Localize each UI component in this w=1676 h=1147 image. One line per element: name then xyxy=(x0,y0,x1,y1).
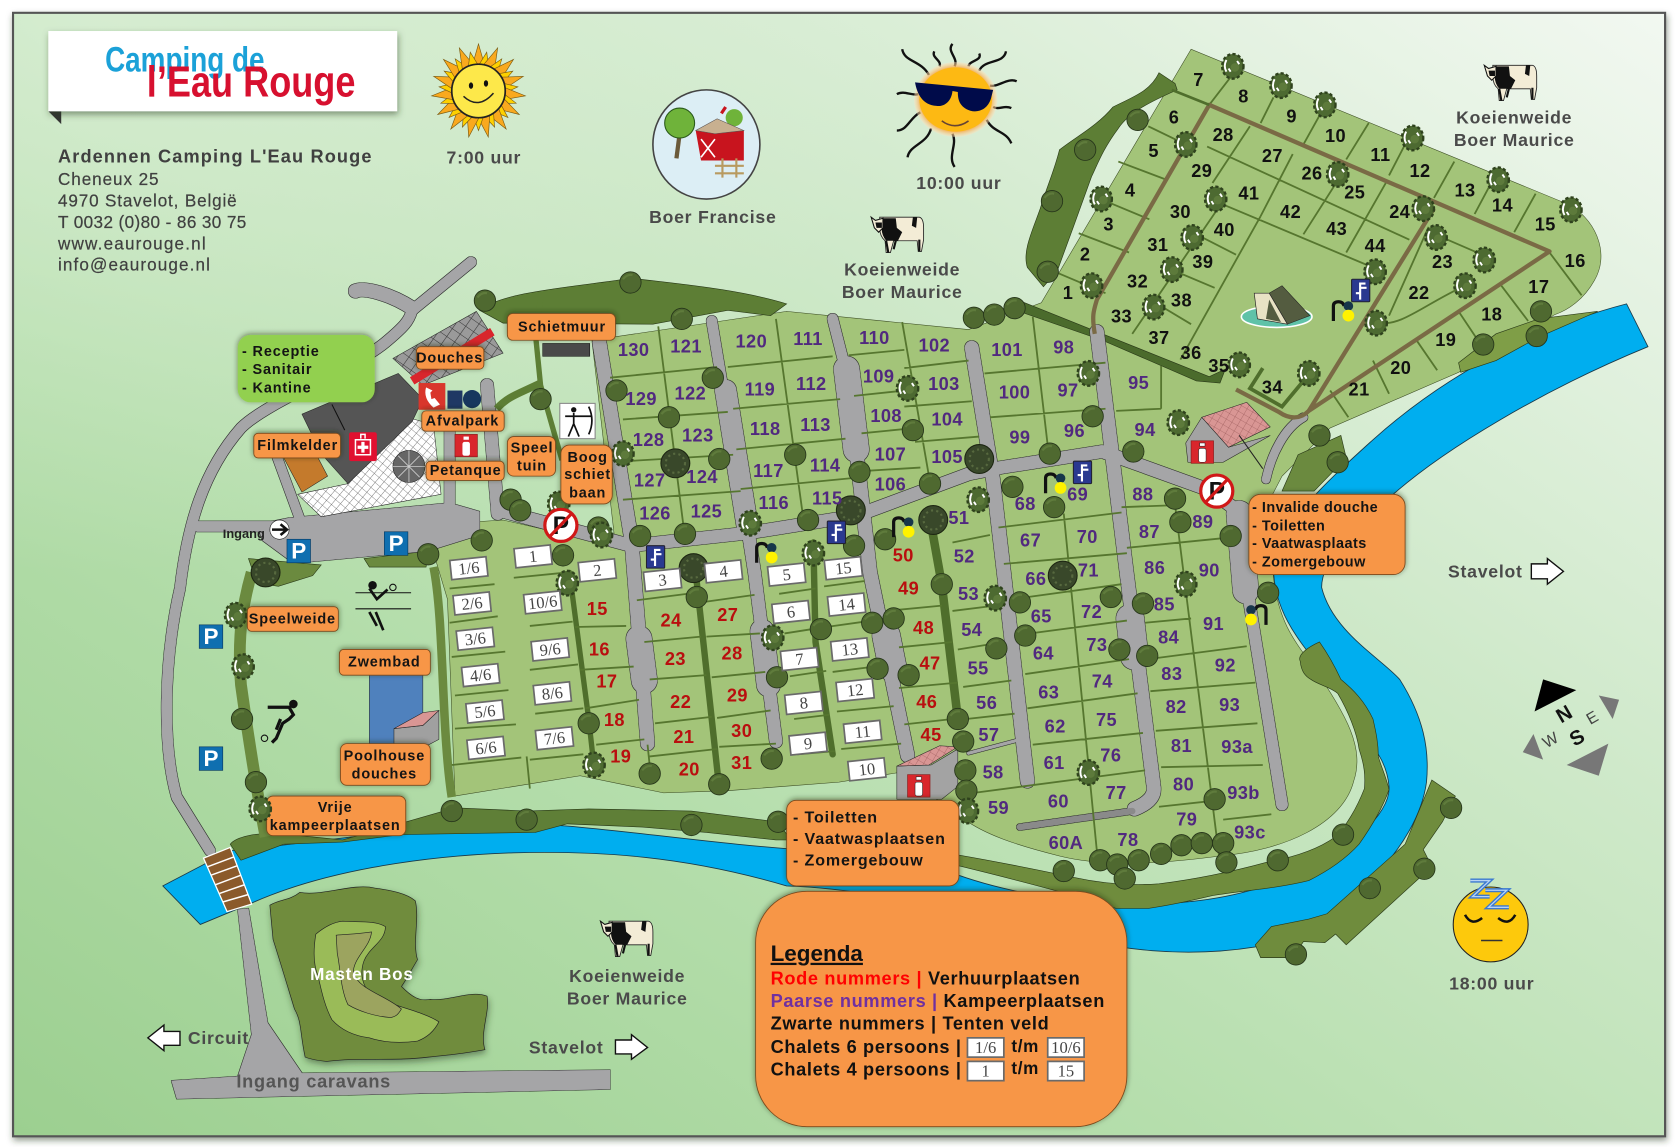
legend panel xyxy=(756,891,1127,1127)
compass xyxy=(1523,679,1619,776)
purple camping pitch numbers: 64 xyxy=(1033,644,1054,664)
orange label: Schietmuur: Schietmuur xyxy=(518,319,606,335)
chalet number plates: 3/6 xyxy=(464,628,487,649)
orange label: Douches: Douches xyxy=(416,350,483,366)
orange label: Petanque: Petanque xyxy=(430,463,502,479)
orange label: Speeltuin: Speel xyxy=(511,440,553,456)
direction: Stavelot east: Stavelot xyxy=(1448,561,1523,581)
orange label: Speelweide xyxy=(247,607,338,631)
red rental pitch numbers: 49 xyxy=(898,578,919,598)
red rental pitch numbers: 30 xyxy=(731,721,752,741)
purple camping pitch numbers: 63 xyxy=(1038,682,1059,702)
black tent field numbers: 44 xyxy=(1365,236,1386,256)
chalet number plates: 1/6 xyxy=(457,558,480,579)
entrance arrow: Ingang xyxy=(223,526,265,541)
orange label: Speeltuin: tuin xyxy=(517,459,547,475)
purple camping pitch numbers: 85 xyxy=(1154,595,1175,615)
red rental pitch numbers: 50 xyxy=(893,545,914,565)
icon: cow and label top right: Koeienweide xyxy=(1456,108,1572,128)
label: 18:00 uur: 18:00 uur xyxy=(1449,973,1534,993)
purple camping pitch numbers: 79 xyxy=(1176,810,1197,830)
purple camping pitch numbers: 84 xyxy=(1158,628,1180,648)
chalet number plates: 15 xyxy=(834,558,853,578)
purple camping pitch numbers: 51 xyxy=(948,508,969,528)
orange label: Zwembad xyxy=(339,649,430,675)
icon: volleyball players xyxy=(355,582,411,630)
purple camping pitch numbers: 108 xyxy=(870,406,902,426)
purple camping pitch numbers: 122 xyxy=(675,384,706,404)
orange label: Zwembad: Zwembad xyxy=(348,654,421,670)
green label: Receptie: - Sanitair xyxy=(242,362,312,378)
chalet number plates: 9/6 xyxy=(539,639,562,660)
purple camping pitch numbers: 53 xyxy=(958,584,979,604)
black tent field numbers: 35 xyxy=(1208,356,1229,376)
red rental pitch numbers: 19 xyxy=(610,746,631,766)
purple camping pitch numbers: 93 xyxy=(1219,695,1240,715)
chalet number plates: 10 xyxy=(858,759,876,780)
purple camping pitch numbers: 106 xyxy=(875,475,906,495)
purple camping pitch numbers: 95 xyxy=(1128,373,1149,393)
direction: Stavelot south: Stavelot xyxy=(529,1037,604,1057)
black tent field numbers: 8 xyxy=(1238,86,1249,106)
compass: W xyxy=(1540,728,1562,752)
purple camping pitch numbers: 93c xyxy=(1234,822,1266,842)
purple camping pitch numbers: 60 xyxy=(1048,791,1069,811)
black tent field numbers: 40 xyxy=(1214,220,1235,240)
roads xyxy=(167,262,1303,1099)
purple camping pitch numbers: 124 xyxy=(686,467,718,487)
icon: cow and label bottom: Boer Maurice xyxy=(567,988,688,1008)
black tent field numbers: 36 xyxy=(1181,343,1202,363)
tent field icon xyxy=(1241,286,1312,327)
purple camping pitch numbers: 73 xyxy=(1086,635,1107,655)
purple camping pitch numbers: 123 xyxy=(682,425,714,445)
chalet number plates: 12 xyxy=(846,680,864,700)
icons: parking signs xyxy=(199,531,408,771)
purple camping pitch numbers: 105 xyxy=(931,447,963,467)
purple camping pitch numbers: 59 xyxy=(988,798,1009,818)
purple camping pitch numbers: 80 xyxy=(1173,774,1194,794)
chalet number plates: 1 xyxy=(528,546,538,566)
purple camping pitch numbers: 101 xyxy=(991,340,1023,360)
address text block: Ardennen Camping L'Eau Rouge xyxy=(58,147,371,167)
purple camping pitch numbers: 104 xyxy=(931,409,963,429)
icon: soccer player xyxy=(261,700,297,743)
black tent field numbers: 39 xyxy=(1192,252,1213,272)
chalet number plates: 9 xyxy=(803,734,813,754)
purple camping pitch numbers: 55 xyxy=(968,659,989,679)
red rental pitch numbers: 16 xyxy=(589,639,610,659)
purple camping pitch numbers: 130 xyxy=(618,340,649,360)
black tent field numbers: 27 xyxy=(1262,146,1283,166)
bridge xyxy=(204,847,252,912)
compass: S xyxy=(1566,725,1589,751)
black tent field numbers: 3 xyxy=(1103,215,1114,235)
address text block: info@eaurouge.nl xyxy=(58,256,210,275)
icons: water taps xyxy=(646,279,1370,568)
swimming pool and poolhouse xyxy=(369,672,439,748)
purple camping pitch numbers: 61 xyxy=(1044,753,1065,773)
black tent field numbers: 17 xyxy=(1528,277,1549,297)
icon: cow and label top right xyxy=(1454,65,1575,150)
purple camping pitch numbers: 107 xyxy=(875,445,906,465)
black tent field numbers: 24 xyxy=(1389,202,1411,222)
river xyxy=(163,304,1648,952)
campsite ground xyxy=(428,49,1601,863)
black tent field numbers xyxy=(1063,70,1586,399)
purple camping pitch numbers: 88 xyxy=(1132,484,1153,504)
orange label: Filmkelder: Filmkelder xyxy=(257,438,338,454)
purple camping pitch numbers: 126 xyxy=(639,504,671,524)
chalet number plates: 7 xyxy=(794,649,805,669)
icon: archery xyxy=(560,403,595,439)
orange label: east facilities: - Zomergebouw xyxy=(1252,554,1366,570)
purple camping pitch numbers: 52 xyxy=(954,546,975,566)
black tent field numbers: 11 xyxy=(1370,145,1391,165)
legend panel: t/m xyxy=(1011,1037,1039,1056)
icon: cow and label near sunglasses sun xyxy=(842,217,963,302)
direction: Stavelot south xyxy=(529,1035,648,1059)
chalet number plates: 5/6 xyxy=(473,701,496,722)
orange label: Afvalpark: Afvalpark xyxy=(426,414,499,430)
direction: Stavelot east xyxy=(1448,559,1563,584)
orange label: Filmkelder xyxy=(254,433,340,458)
purple camping pitch numbers: 69 xyxy=(1067,484,1088,504)
purple camping pitch numbers: 60A xyxy=(1049,833,1083,853)
black tent field numbers: 42 xyxy=(1280,202,1301,222)
address text block: www.eaurouge.nl xyxy=(57,234,206,253)
chalet number plates: 2/6 xyxy=(461,593,484,614)
black tent field numbers: 13 xyxy=(1454,180,1476,200)
black tent field numbers: 37 xyxy=(1148,328,1170,348)
logo banner: l’Eau Rouge xyxy=(147,57,355,106)
purple camping pitch numbers: 112 xyxy=(796,374,827,394)
purple camping pitch numbers: 119 xyxy=(745,379,775,399)
forest: Masten Bos xyxy=(270,887,488,1061)
purple camping pitch numbers: 98 xyxy=(1053,338,1074,358)
red rental pitch numbers xyxy=(587,545,942,779)
red rental pitch numbers: 15 xyxy=(587,599,608,619)
black tent field numbers: 10 xyxy=(1325,126,1346,146)
purple camping pitch numbers: 54 xyxy=(961,620,983,640)
purple camping pitch numbers: 89 xyxy=(1192,512,1213,532)
red rental pitch numbers: 23 xyxy=(665,649,686,669)
orange label: Poolhouse douches: Poolhouse xyxy=(344,748,425,764)
orange label: Boogschietbaan xyxy=(561,445,612,504)
brown footpaths xyxy=(1093,90,1550,417)
icon: cow and label near sunglasses sun: Boer Maurice xyxy=(842,282,963,302)
purple camping pitch numbers: 86 xyxy=(1144,558,1165,578)
chalet number plates: 5 xyxy=(782,565,792,584)
direction: Circuit: Circuit xyxy=(188,1028,249,1048)
purple camping pitch numbers: 110 xyxy=(859,328,890,348)
address text block: T 0032 (0)80 - 86 30 75 xyxy=(58,213,246,232)
purple camping pitch numbers: 127 xyxy=(634,470,665,490)
orange label: Speelweide: Speelweide xyxy=(249,612,336,628)
tree overlapping the Vrije kampeerplaatsen label xyxy=(250,797,271,821)
purple camping pitch numbers: 100 xyxy=(999,383,1030,403)
chalet number plates: 11 xyxy=(854,722,872,742)
hedges and green river banks xyxy=(230,73,1598,958)
chalet number plates: 4 xyxy=(718,561,729,581)
chalet number plates: 6 xyxy=(786,602,796,622)
purple camping pitch numbers: 102 xyxy=(918,336,950,356)
icon: cow and label near sunglasses sun: Koeienweide xyxy=(844,260,960,280)
purple camping pitch numbers: 74 xyxy=(1092,672,1113,692)
red rental pitch numbers: 48 xyxy=(913,618,934,638)
orange label: Boogschietbaan: Boog xyxy=(567,450,608,466)
black tent field numbers: 4 xyxy=(1125,180,1136,200)
red rental pitch numbers: 21 xyxy=(673,727,694,747)
legend panel: t/m xyxy=(1011,1059,1039,1078)
black tent field numbers: 9 xyxy=(1286,107,1297,127)
black tent field numbers: 6 xyxy=(1169,108,1179,128)
purple camping pitch numbers: 93b xyxy=(1227,783,1260,803)
hedge rows between pitches xyxy=(569,524,958,789)
orange label: east facilities: - Vaatwasplaats xyxy=(1252,536,1367,552)
orange label: east facilities: - Invalide douche xyxy=(1252,500,1378,516)
black tent field numbers: 14 xyxy=(1492,195,1513,215)
orange label: south facilities xyxy=(787,800,959,886)
red rental pitch numbers: 24 xyxy=(661,611,682,631)
purple camping pitch numbers: 111 xyxy=(793,329,823,349)
label: 7:00 uur: 7:00 uur xyxy=(447,147,521,167)
legend panel: Legenda xyxy=(771,941,863,966)
orange label: Poolhouse douches xyxy=(340,744,430,785)
chalet number plates: 4/6 xyxy=(469,665,492,686)
red rental pitch numbers: 45 xyxy=(921,725,942,745)
address text block: Cheneux 25 xyxy=(58,170,159,189)
chalet number plates: 13 xyxy=(841,639,859,660)
purple camping pitch numbers: 92 xyxy=(1215,656,1236,676)
buildings: reception area xyxy=(284,300,590,517)
black tent field numbers: 19 xyxy=(1435,330,1456,350)
logo banner xyxy=(48,31,397,124)
icon: cow and label bottom: Koeienweide xyxy=(569,966,685,986)
purple camping pitch numbers: 93a xyxy=(1221,737,1253,757)
red rental pitch numbers: 29 xyxy=(727,685,748,705)
black tent field numbers: 28 xyxy=(1213,125,1234,145)
purple camping pitch numbers: 78 xyxy=(1117,830,1138,850)
legend panel: Rode nummers | Verhuurplaatsen xyxy=(771,968,1080,988)
chalet number plates: 14 xyxy=(837,594,857,615)
purple camping pitch numbers: 65 xyxy=(1031,606,1052,626)
icon: cow and label bottom xyxy=(567,921,688,1008)
black tent field numbers: 16 xyxy=(1565,251,1586,271)
purple camping pitch numbers: 121 xyxy=(670,337,702,357)
icon: farm circle xyxy=(653,90,760,199)
orange label: Speeltuin xyxy=(507,437,556,476)
chalet number plates: 8/6 xyxy=(541,683,564,704)
black tent field numbers: 43 xyxy=(1326,219,1347,239)
black tent field numbers: 30 xyxy=(1170,202,1191,222)
green label: Receptie: - Kantine xyxy=(242,380,311,396)
legend panel: 15 xyxy=(1058,1062,1074,1081)
purple camping pitch numbers: 90 xyxy=(1199,560,1220,580)
purple camping pitch numbers: 66 xyxy=(1025,569,1046,589)
legend panel: Chalets 6 persoons | xyxy=(771,1037,962,1057)
purple camping pitch numbers: 103 xyxy=(928,374,960,394)
purple camping pitch numbers: 116 xyxy=(758,493,789,513)
orange label: east facilities xyxy=(1249,494,1405,575)
purple camping pitch numbers: 117 xyxy=(753,461,784,481)
black tent field numbers: 29 xyxy=(1191,161,1212,181)
purple camping pitch numbers: 77 xyxy=(1106,783,1127,803)
icons: lamps xyxy=(757,301,1354,625)
toilet building south xyxy=(897,746,958,799)
purple camping pitch numbers: 115 xyxy=(812,489,843,509)
purple camping pitch numbers xyxy=(618,328,1266,853)
black tent field numbers: 41 xyxy=(1238,184,1259,204)
label: Masten Bos: Masten Bos xyxy=(310,965,414,984)
chalet number plates xyxy=(450,545,886,781)
orange label: south facilities: - Vaatwasplaatsen xyxy=(793,830,946,848)
black tent field numbers: 2 xyxy=(1080,245,1090,265)
icons: phone, recycling, first aid, fire xyxy=(349,383,481,461)
black tent field numbers: 33 xyxy=(1111,307,1132,327)
purple camping pitch numbers: 120 xyxy=(736,331,767,351)
orange label: Vrije kampeerplaatsen: kampeerplaatsen xyxy=(270,818,401,834)
legend panel: Zwarte nummers | Tenten veld xyxy=(771,1013,1049,1033)
orange label: Boogschietbaan: schiet xyxy=(564,467,611,483)
purple camping pitch numbers: 76 xyxy=(1100,745,1121,765)
icon: cow and label top right: Boer Maurice xyxy=(1454,130,1575,150)
black tent field numbers: 18 xyxy=(1481,305,1502,325)
black tent field numbers: 12 xyxy=(1410,161,1431,181)
black tent field numbers: 15 xyxy=(1535,215,1556,235)
legend panel: 1/6 xyxy=(975,1038,996,1057)
black tent field numbers: 32 xyxy=(1127,271,1148,291)
icon: sun with sunglasses xyxy=(897,44,1017,167)
icons: no parking xyxy=(545,475,1233,541)
black tent field numbers: 34 xyxy=(1262,377,1283,397)
purple camping pitch numbers: 71 xyxy=(1078,560,1099,580)
red rental pitch numbers: 46 xyxy=(916,692,937,712)
orange label: Boogschietbaan: baan xyxy=(569,485,606,501)
purple camping pitch numbers: 68 xyxy=(1015,494,1036,514)
orange label: south facilities: - Zomergebouw xyxy=(793,851,924,869)
purple camping pitch numbers: 97 xyxy=(1058,381,1079,401)
purple camping pitch numbers: 99 xyxy=(1009,428,1030,448)
purple camping pitch numbers: 91 xyxy=(1203,614,1224,634)
black tent field numbers: 5 xyxy=(1148,141,1159,161)
black tent field numbers: 23 xyxy=(1432,252,1453,272)
orange label: east facilities: - Toiletten xyxy=(1252,518,1325,534)
chalet number plates: 10/6 xyxy=(527,591,558,613)
toilet building east xyxy=(1186,402,1270,469)
black tent field numbers: 1 xyxy=(1063,283,1073,303)
black tent field numbers: 7 xyxy=(1193,70,1204,90)
purple camping pitch numbers: 94 xyxy=(1135,420,1156,440)
purple camping pitch numbers: 128 xyxy=(633,430,664,450)
entrance arrow xyxy=(223,520,289,541)
chalet number plates: 3 xyxy=(657,570,668,590)
purple camping pitch numbers: 96 xyxy=(1064,421,1085,441)
label: 10:00 uur: 10:00 uur xyxy=(916,173,1001,193)
red rental pitch numbers: 28 xyxy=(722,644,743,664)
red rental pitch numbers: 47 xyxy=(919,653,941,673)
orange label: Schietmuur xyxy=(507,313,615,340)
chalet number plates: 8 xyxy=(799,693,809,713)
pitch dividers xyxy=(450,77,1582,855)
green label: Receptie: - Receptie xyxy=(242,344,320,360)
red rental pitch numbers: 27 xyxy=(717,605,738,625)
label: Ingang caravans: Ingang caravans xyxy=(236,1072,391,1092)
logo banner: Camping de xyxy=(105,41,264,80)
purple camping pitch numbers: 118 xyxy=(750,419,781,439)
green label: Receptie xyxy=(238,335,375,430)
black tent field numbers: 20 xyxy=(1390,358,1411,378)
purple camping pitch numbers: 82 xyxy=(1166,697,1187,717)
purple camping pitch numbers: 58 xyxy=(983,763,1004,783)
purple camping pitch numbers: 75 xyxy=(1096,710,1117,730)
purple camping pitch numbers: 87 xyxy=(1139,522,1160,542)
purple camping pitch numbers: 129 xyxy=(625,389,657,409)
red rental pitch numbers: 17 xyxy=(596,672,617,692)
purple camping pitch numbers: 72 xyxy=(1081,602,1102,622)
orange label: Vrije kampeerplaatsen: Vrije xyxy=(318,800,353,816)
trees xyxy=(225,54,1582,965)
direction: Circuit xyxy=(148,1025,249,1051)
purple camping pitch numbers: 67 xyxy=(1020,530,1041,550)
purple camping pitch numbers: 114 xyxy=(810,455,841,475)
black tent field numbers: 26 xyxy=(1301,163,1323,183)
red rental pitch numbers: 22 xyxy=(670,692,691,712)
icon: morning sun xyxy=(431,44,526,138)
purple camping pitch numbers: 62 xyxy=(1045,717,1066,737)
black tent field numbers: 25 xyxy=(1344,183,1365,203)
dark curved hedge near pitch 34 xyxy=(1250,368,1309,407)
icon: sleeping face xyxy=(1453,881,1528,962)
red rental pitch numbers: 20 xyxy=(679,759,700,779)
chalet number plates: 7/6 xyxy=(543,728,566,749)
red rental pitch numbers: 18 xyxy=(604,710,625,730)
purple camping pitch numbers: 57 xyxy=(978,725,999,745)
legend panel: 1 xyxy=(982,1062,990,1081)
address text block xyxy=(57,147,371,275)
purple camping pitch numbers: 125 xyxy=(691,501,722,521)
purple camping pitch numbers: 81 xyxy=(1171,736,1192,756)
chalet number plates: 6/6 xyxy=(474,737,498,758)
red rental pitch numbers: 31 xyxy=(731,753,752,773)
orange label: Vrije kampeerplaatsen xyxy=(267,796,406,836)
orange label: south facilities: - Toiletten xyxy=(793,808,878,826)
legend panel: Paarse nummers | Kampeerplaatsen xyxy=(771,991,1105,1011)
address text block: 4970 Stavelot, België xyxy=(58,192,237,211)
chalet number plates: 2 xyxy=(592,560,602,580)
purple camping pitch numbers: 109 xyxy=(863,367,894,387)
label: Boer Francise: Boer Francise xyxy=(649,207,777,227)
black tent field numbers: 22 xyxy=(1408,283,1430,303)
compass: E xyxy=(1583,707,1601,728)
black tent field numbers: 21 xyxy=(1349,379,1370,399)
purple camping pitch numbers: 56 xyxy=(976,693,997,713)
orange label: Poolhouse douches: douches xyxy=(352,767,417,783)
legend panel: Chalets 4 persoons | xyxy=(771,1059,962,1079)
black tent field numbers: 31 xyxy=(1147,235,1168,255)
compass: N xyxy=(1553,702,1576,728)
black tent field numbers: 38 xyxy=(1171,291,1192,311)
purple camping pitch numbers: 83 xyxy=(1161,664,1182,684)
purple camping pitch numbers: 70 xyxy=(1077,527,1098,547)
legend panel: 10/6 xyxy=(1051,1038,1081,1057)
purple camping pitch numbers: 113 xyxy=(800,415,831,435)
